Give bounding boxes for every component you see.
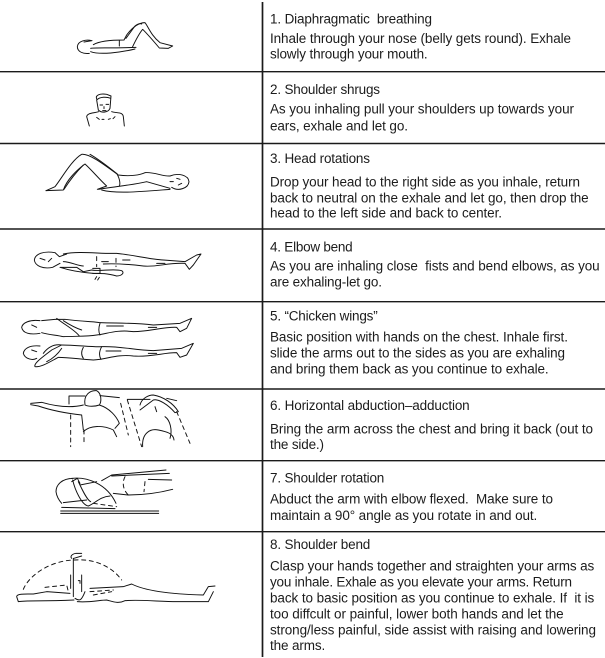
text: exercise 2 instructions: As you inhaling pull your shoulders up towards your xyxy=(270,102,574,117)
text: exercise 7 instructions: Abduct the arm with elbow flexed. Make sure to xyxy=(270,491,553,506)
text: exercise 6 instructions: Bring the arm across the chest and bring it back (out to xyxy=(270,421,593,436)
text: exercise 3 instructions: back to neutral on the exhale and let go, then drop the xyxy=(270,190,589,205)
text: exercise 8 instructions: back to basic position as you continue to exhale. If it is xyxy=(270,590,595,605)
panel: exercise 3 xyxy=(46,151,589,221)
icon: shoulder rotation figure xyxy=(56,470,173,513)
text: exercise 8 instructions: you inhale. Exhale as you elevate your arms. Return xyxy=(270,574,572,589)
panel: exercise 2 xyxy=(87,82,574,134)
panel: exercise 5 xyxy=(22,309,568,376)
text: exercise 7 instructions: maintain a 90° angle as you rotate in and out. xyxy=(270,508,537,523)
text: exercise 4 instructions: As you are inhaling close fists and bend elbows, as you xyxy=(270,259,600,274)
heading: head rotations: 3. Head rotations xyxy=(270,151,370,166)
text: exercise 2 instructions xyxy=(270,102,574,134)
text: exercise 3 instructions xyxy=(270,175,589,221)
heading: chicken wings: 5. “Chicken wings” xyxy=(270,309,378,324)
text: exercise 5 instructions: slide the arms out to the sides as you are exhaling xyxy=(270,346,565,361)
text: exercise 5 instructions: Basic position with hands on the chest. Inhale first. xyxy=(270,330,568,345)
panel: exercise 7 xyxy=(56,470,553,523)
panel: exercise 6 xyxy=(31,391,593,452)
icon: person lying with knees bent xyxy=(77,23,173,53)
text: exercise 3 instructions: Drop your head to the right side as you inhale, return xyxy=(270,175,580,190)
heading: shoulder rotation: 7. Shoulder rotation xyxy=(270,470,384,485)
text: exercise 4 instructions xyxy=(270,259,600,290)
icon: head and shoulders xyxy=(87,94,124,126)
text: exercise 1 instructions: slowly through your mouth. xyxy=(270,47,428,62)
panel: exercise 8 xyxy=(17,537,596,653)
text: exercise 5 instructions xyxy=(270,330,568,376)
icon: person lying with arms raised and motion arc xyxy=(17,553,215,602)
text: exercise 7 instructions xyxy=(270,491,553,523)
panel: exercise 1 xyxy=(77,12,571,62)
text: exercise 6 instructions: the side.) xyxy=(270,437,324,452)
icon: person lying, head rotation xyxy=(46,154,189,192)
text: exercise 8 instructions: too diffcult or painful, lower both hands and let the xyxy=(270,606,564,621)
heading: horizontal abduction-adduction: 6. Horizontal abduction–adduction xyxy=(270,398,470,413)
text: exercise 5 instructions: and bring them back as you continue to exhale. xyxy=(270,361,549,376)
text: exercise 8 instructions: strong/less painful, side assist with raising and lowering xyxy=(270,622,596,637)
panel: exercise 4 xyxy=(34,240,600,290)
icon: arm abduction and adduction figures xyxy=(31,391,190,447)
text: exercise 8 instructions: the arms. xyxy=(270,638,325,653)
text: exercise 6 instructions xyxy=(270,421,593,452)
text: exercise 2 instructions: ears, exhale and let go. xyxy=(270,119,408,134)
heading: elbow bend: 4. Elbow bend xyxy=(270,240,353,255)
heading: shoulder bend: 8. Shoulder bend xyxy=(270,537,370,552)
heading: diaphragmatic breathing: 1. Diaphragmatic breathing xyxy=(270,12,432,26)
text: exercise 8 instructions xyxy=(270,559,596,653)
text: exercise 8 instructions: Clasp your hands together and straighten your arms as xyxy=(270,559,595,574)
icon: person lying, elbow bend xyxy=(34,252,201,280)
text: exercise 1 instructions: Inhale through your nose (belly gets round). Exhale xyxy=(270,31,571,46)
text: exercise 4 instructions: are exhaling-let go. xyxy=(270,275,382,290)
heading: shoulder shrugs: 2. Shoulder shrugs xyxy=(270,82,380,97)
text: exercise 3 instructions: head to the left side and back to center. xyxy=(270,206,502,221)
text: exercise 1 instructions xyxy=(270,31,571,62)
icon: two people lying, chicken wings xyxy=(22,318,193,367)
